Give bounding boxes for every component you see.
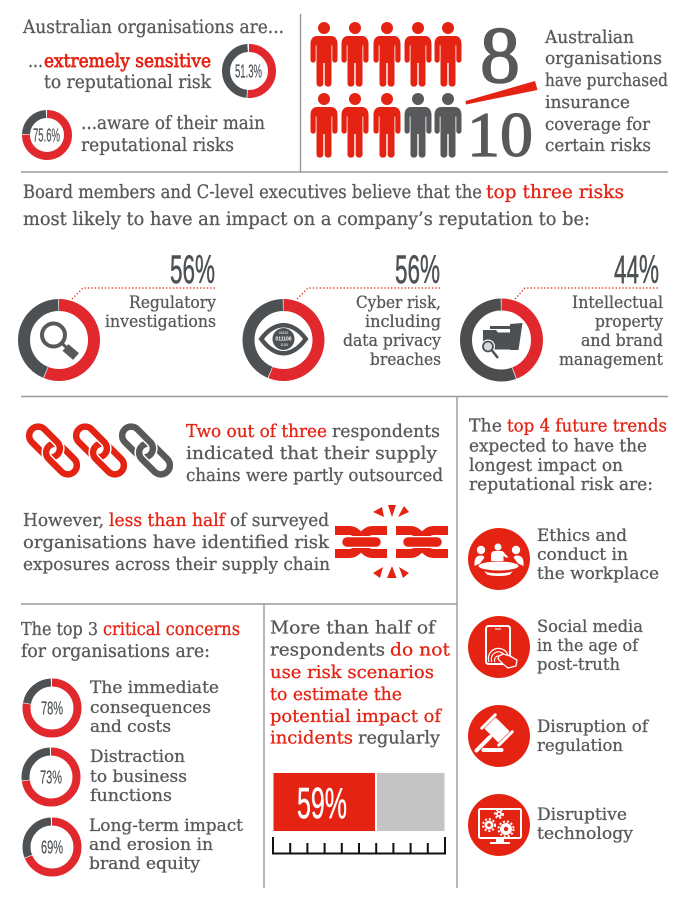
bar chart: 59% [274, 773, 444, 831]
donut: 51.3% [226, 48, 272, 94]
label: ethics and conduct [537, 526, 659, 583]
label: immediate consequences: The immediate [90, 678, 219, 697]
label: intellectual property and brand management: Intellectual [572, 293, 663, 312]
donut: 56% with eye: 00110 [279, 331, 288, 335]
text: do not use risk scenarios: regularly [358, 728, 441, 748]
label: distraction [90, 747, 187, 805]
label: regulatory investigations: investigations [105, 312, 216, 331]
text: do not use risk scenarios: to estimate the [270, 684, 402, 705]
label: long-term impact: Long-term impact [89, 816, 243, 835]
pictogram: ten people, eight red [310, 22, 462, 158]
text: less than half: less than half [109, 510, 226, 531]
text: extremely sensitive: ... [28, 51, 43, 72]
heading: critical concerns: for organisations are: [21, 642, 210, 662]
text: extremely sensitive: extremely sensitive [44, 51, 211, 72]
heading: top three risks: top three risks [486, 182, 624, 203]
text: insurance coverage: Australian [544, 27, 634, 48]
donut: 51.3%: 51.3% [235, 62, 262, 82]
leader line [72, 288, 216, 299]
label: long-term impact [89, 816, 243, 873]
value: 56%: 56% [395, 248, 440, 292]
heading: top three risks [23, 182, 624, 230]
text: insurance coverage [544, 27, 668, 156]
label: disruption of regulation [537, 717, 650, 755]
panel: awareness statistics [22, 17, 284, 156]
label: intellectual property and brand management [559, 293, 664, 369]
text: insurance coverage: certain risks [545, 135, 651, 156]
label: cyber risk: Cyber risk, [356, 293, 441, 312]
donut: 75.6% [26, 114, 68, 156]
fraction: 8 over 10: 8 [480, 12, 520, 100]
icon: gavel [466, 705, 530, 767]
text: two out of three: indicated that their supply [186, 443, 438, 464]
text: two out of three: respondents [332, 421, 440, 442]
donut: 75.6%: 75.6% [33, 126, 60, 146]
text: do not use risk scenarios: respondents [270, 640, 385, 660]
label: intellectual property and brand management: property [595, 312, 664, 331]
donut: 56% with eye: 011100 [275, 336, 292, 342]
donut: 78% [26, 682, 78, 734]
label: intellectual property and brand management: management [559, 350, 663, 369]
label: disruptive technology: technology [537, 824, 634, 843]
text: insurance coverage: organisations [545, 48, 662, 69]
heading: critical concerns: critical concerns [103, 620, 240, 640]
label: disruptive technology [537, 805, 634, 843]
value: 56%: 56% [170, 248, 215, 292]
heading: critical concerns [21, 620, 240, 662]
heading: top 4 future trends: expected to have the [469, 436, 647, 456]
text: insurance coverage: coverage for [545, 114, 650, 135]
label: immediate consequences [90, 678, 219, 736]
panel: supply chains [23, 421, 448, 578]
label: cyber risk [343, 293, 442, 369]
label: regulatory investigations: Regulatory [129, 293, 217, 312]
text: do not use risk scenarios: potential impact of [270, 706, 442, 727]
fraction: 8 over 10 [466, 12, 538, 170]
heading: top 4 future trends [469, 416, 667, 495]
label: ethics and conduct: Ethics and [537, 526, 627, 545]
heading: top 4 future trends: The [469, 416, 502, 436]
label: distraction: functions [90, 786, 172, 805]
text: less than half: However, [23, 510, 104, 531]
panel: top 4 future trends [466, 416, 667, 856]
label: immediate consequences: consequences [90, 698, 211, 717]
text: less than half: of surveyed [230, 510, 329, 531]
heading: top 4 future trends: longest impact on [469, 455, 623, 476]
donut: 69% [26, 822, 78, 872]
label: cyber risk: breaches [370, 350, 441, 369]
heading: critical concerns: The top 3 [21, 620, 98, 640]
heading: top three risks: Board members and C-level executives believe that the [23, 182, 482, 203]
donut: 56% with eye [248, 305, 318, 375]
label: ethics and conduct: conduct in [537, 545, 628, 564]
text: aware of main risks: reputational risks [81, 135, 234, 156]
text: insurance coverage: have purchased [545, 70, 668, 91]
label: distraction: Distraction [90, 747, 185, 766]
label: cyber risk: including [365, 312, 441, 331]
label: intellectual property and brand management: and brand [581, 331, 663, 350]
donut: 78%: 78% [41, 698, 63, 718]
panel: cyber risk 56% [248, 248, 442, 375]
panel: top 3 critical concerns [21, 620, 243, 873]
donut: 73%: 73% [40, 768, 62, 788]
icon: phone with touch [468, 616, 530, 678]
icon: meeting table [468, 528, 530, 590]
leader line [515, 288, 658, 299]
text: two out of three [186, 421, 443, 486]
text: aware of main risks [81, 113, 265, 156]
bar chart: 59%: 59% [297, 779, 347, 828]
label: long-term impact: and erosion in [89, 835, 213, 854]
text: less than half: exposures across their supply chain [23, 554, 330, 575]
donut: 56% with eye: 1100 [280, 343, 288, 347]
panel: 8 out of 10 insurance [310, 12, 668, 170]
label: regulatory investigations [105, 293, 217, 331]
icon: three chains, two red [25, 423, 174, 478]
text: less than half [23, 510, 330, 575]
text: do not use risk scenarios: More than half of [270, 618, 436, 638]
panel: regulatory investigations 56% [24, 248, 217, 375]
text: insurance coverage: insurance [545, 92, 630, 113]
label: disruptive technology: Disruptive [537, 805, 627, 824]
label: disruption of regulation: regulation [537, 736, 623, 755]
text: do not use risk scenarios: use risk scenarios [270, 662, 434, 683]
label: immediate consequences: and costs [90, 717, 171, 736]
text: do not use risk scenarios: do not [390, 640, 451, 660]
text: less than half: organisations have identified risk [23, 532, 330, 553]
fraction: 8 over 10: 10 [467, 99, 533, 170]
donut: 73% [26, 752, 76, 802]
panel: intellectual property 44% [466, 248, 664, 376]
icon: monitor with gears [468, 794, 530, 856]
heading: top 4 future trends: reputational risk are: [469, 474, 653, 495]
donut: 44% with folder [466, 304, 537, 376]
text: extremely sensitive: to reputational risk [44, 72, 212, 93]
label: long-term impact: brand equity [89, 854, 201, 873]
text: aware of main risks: ...aware of their main [81, 113, 265, 134]
donut: 69%: 69% [41, 838, 63, 858]
leader line [297, 288, 440, 299]
ruler scale [273, 837, 445, 854]
heading: top 4 future trends: top 4 future trends [507, 416, 667, 436]
label: social media: in the age of [537, 636, 640, 655]
label: disruption of regulation: Disruption of [537, 717, 650, 736]
panel: risk scenarios [270, 618, 451, 854]
text: two out of three: chains were partly outsourced [186, 465, 443, 486]
icon: broken chain [335, 505, 448, 578]
text: do not use risk scenarios [270, 618, 451, 748]
text: extremely sensitive [28, 51, 212, 93]
heading: Australian organisations are: Australian organisations are... [22, 17, 284, 38]
value: 44%: 44% [614, 248, 659, 292]
label: distraction: to business [90, 767, 187, 786]
label: cyber risk: data privacy [343, 331, 442, 350]
label: social media [537, 617, 643, 674]
text: two out of three: Two out of three [186, 421, 327, 442]
label: social media: Social media [537, 617, 643, 636]
label: social media: post-truth [537, 655, 620, 674]
heading: top three risks: most likely to have an impact on a company’s reputation to be: [23, 209, 590, 230]
text: do not use risk scenarios: incidents [270, 728, 353, 748]
donut: 56% with magnifier [24, 305, 94, 375]
label: ethics and conduct: the workplace [537, 564, 659, 583]
